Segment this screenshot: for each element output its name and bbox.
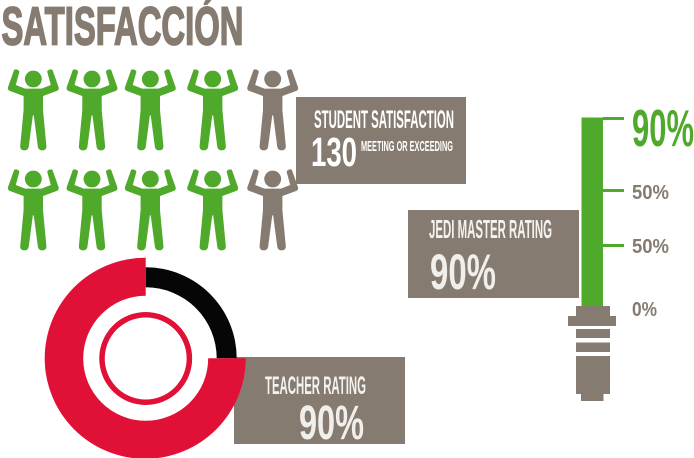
gauge label: 0%: 0% <box>632 299 657 321</box>
gauge label: 50% lower: 50% <box>632 236 669 258</box>
panel: student satisfaction <box>296 97 466 184</box>
red arc <box>45 258 246 458</box>
jedi master value: 90% <box>430 244 496 300</box>
panel: teacher rating: TEACHER RATING <box>265 372 366 400</box>
figure row: top <box>8 70 298 150</box>
middle tick <box>603 189 624 192</box>
black arc <box>146 267 237 358</box>
gauge label: 50% upper: 50% <box>632 182 669 204</box>
donut chart <box>45 258 246 458</box>
top tick <box>603 117 624 120</box>
teacher rating value: 90% <box>299 397 364 450</box>
figure row: bottom <box>8 170 298 250</box>
meeting or exceeding label: MEETING OR EXCEEDING <box>361 139 453 155</box>
panel: teacher rating <box>234 357 405 450</box>
lower tick <box>603 244 624 247</box>
lightsaber gauge <box>568 117 624 401</box>
inner red ring <box>102 315 189 402</box>
text: STUDENT SATISFACTION <box>314 106 454 134</box>
hilt <box>568 306 616 401</box>
student count: 130 <box>311 129 357 175</box>
blade <box>582 118 603 308</box>
panel: jedi master rating <box>408 210 579 300</box>
